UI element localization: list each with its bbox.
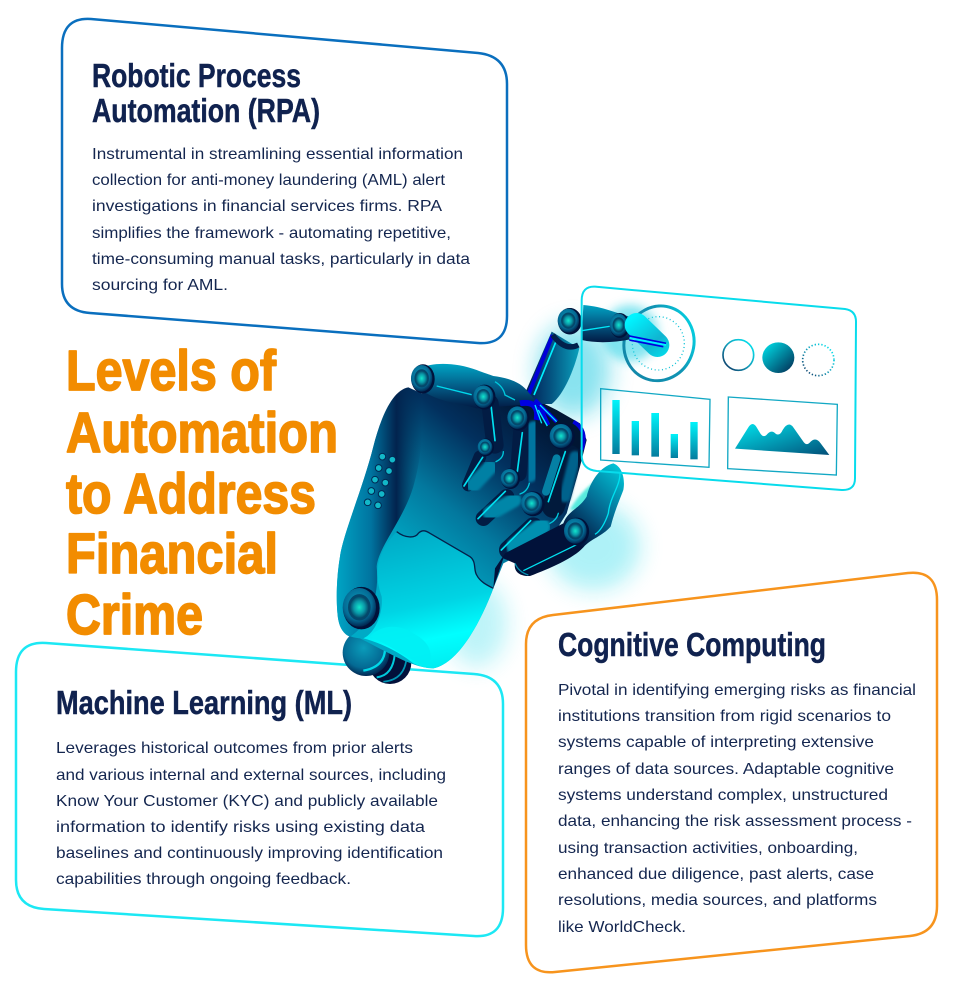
text block: Cognitive description: ranges of data sources. Adaptable cognitive: [558, 761, 894, 778]
text block: ML description: information to identify risks using existing data: [56, 819, 425, 836]
pointing finger: [525, 308, 582, 404]
back knuckle joint: [411, 364, 435, 394]
text block: Cognitive description: using transaction activities, onboarding,: [558, 840, 858, 857]
title: Financial: [66, 522, 278, 586]
text block: Cognitive description: Pivotal in identifying emerging risks as financial: [558, 682, 916, 699]
text block: ML description: baselines and continuously improving identification: [56, 845, 443, 862]
text block: Cognitive description: systems capable of interpreting extensive: [558, 734, 874, 751]
area chart: [728, 397, 837, 475]
title: Automation: [66, 401, 338, 465]
illustration: holographic dashboard: [558, 287, 856, 490]
status circles: [723, 340, 834, 376]
back of hand band: [420, 364, 537, 408]
title: Crime: [66, 583, 203, 647]
text block: RPA description: simplifies the framework - automating repetitive,: [92, 225, 451, 242]
text block: ML description: capabilities through ongoing feedback.: [56, 871, 351, 888]
palm: [337, 380, 587, 668]
heading: RPA: Automation (RPA): [92, 92, 320, 129]
finger three: [501, 452, 575, 550]
text block: Cognitive description: resolutions, media sources, and platforms: [558, 892, 877, 909]
text block: Cognitive description: like WorldCheck.: [558, 919, 686, 936]
illustration: robotic hand: [337, 308, 640, 684]
title: Levels of: [66, 339, 277, 403]
bar chart: [601, 389, 710, 467]
thumb: [493, 463, 624, 588]
text block: RPA description: [92, 146, 470, 294]
finger one: [464, 403, 503, 486]
text block: RPA description: investigations in financial services firms. RPA: [92, 198, 442, 215]
text block: Cognitive description: institutions transition from rigid scenarios to: [558, 708, 891, 725]
finger two: [478, 428, 534, 519]
blue knuckle bundle: [520, 400, 584, 450]
text block: Cognitive description: enhanced due diligence, past alerts, case: [558, 866, 874, 883]
finger joints: [473, 385, 589, 545]
text block: ML description: Know Your Customer (KYC) and publicly available: [56, 793, 438, 810]
wrist pivot joint: [343, 587, 380, 629]
text block: Cognitive description: systems understand complex, unstructured: [558, 787, 888, 804]
fingers group: [420, 364, 624, 588]
title: [66, 339, 338, 647]
panel: Robotic Process Automation: [62, 19, 507, 343]
palm side strip: [337, 387, 422, 637]
heading: ML: Machine Learning (ML): [56, 684, 352, 721]
touch ring: [558, 296, 704, 391]
text block: ML description: [56, 740, 446, 888]
text block: ML description: Leverages historical outcomes from prior alerts: [56, 740, 413, 757]
text block: ML description: and various internal and external sources, including: [56, 767, 446, 784]
panel: Cognitive Computing: [526, 573, 937, 972]
heading: RPA: Robotic Process: [92, 57, 301, 94]
text block: RPA description: time-consuming manual tasks, particularly in data: [92, 251, 470, 268]
text block: RPA description: Instrumental in streamlining essential information: [92, 146, 463, 163]
text block: RPA description: sourcing for AML.: [92, 277, 228, 294]
text block: Cognitive description: data, enhancing the risk assessment process -: [558, 813, 912, 830]
seam: [397, 531, 493, 588]
palm sensor dots: [364, 453, 396, 509]
title: to Address: [66, 462, 316, 526]
panel: Machine Learning: [16, 643, 503, 936]
text block: RPA description: collection for anti-money laundering (AML) alert: [92, 172, 446, 189]
heading: Cognitive: Cognitive Computing: [558, 626, 826, 663]
wrist cuff: [370, 627, 431, 667]
heading: RPA: [92, 57, 320, 129]
lower palm: [363, 531, 493, 668]
text block: Cognitive description: [558, 682, 916, 936]
dashboard frame: [582, 287, 856, 490]
wrist joint: [343, 629, 411, 684]
